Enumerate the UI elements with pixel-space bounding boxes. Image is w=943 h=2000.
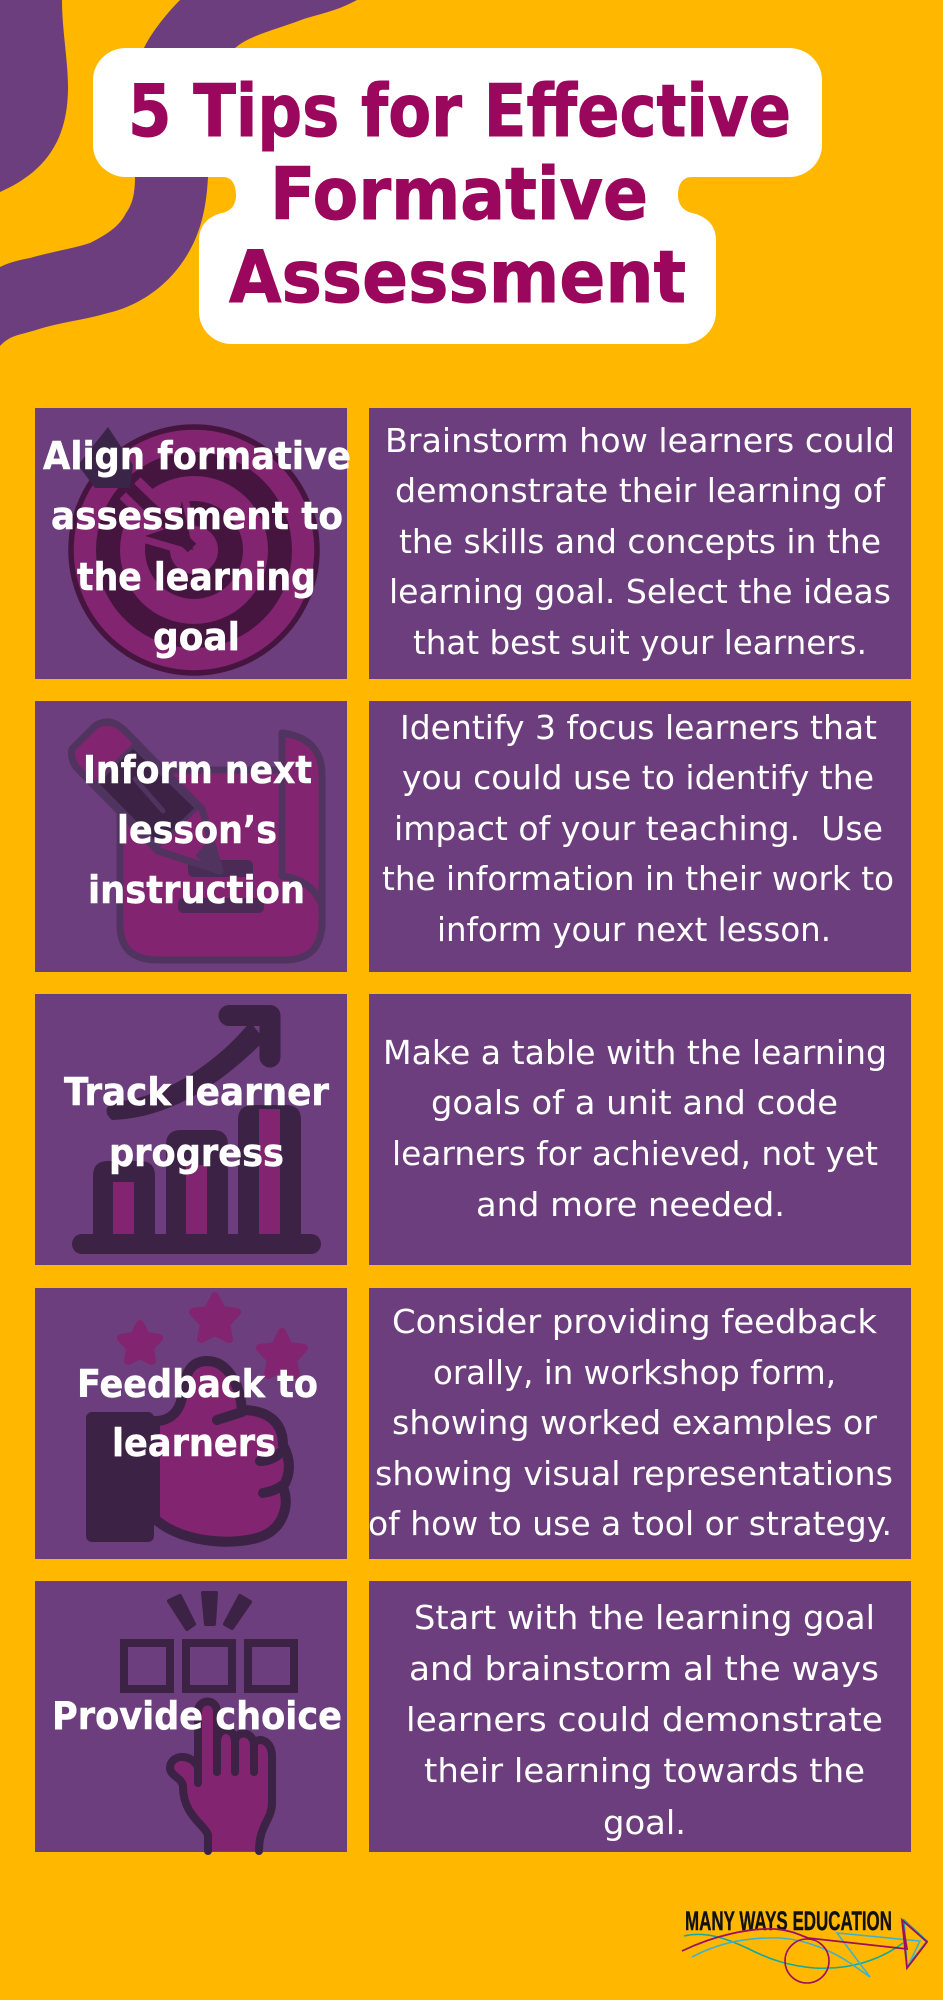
description text: impact of your teaching. Use — [394, 809, 883, 848]
panel: tip 3 heading — [35, 994, 347, 1265]
heading text: learners — [112, 1421, 276, 1465]
icon: pencil and paper — [72, 722, 322, 960]
title text — [128, 69, 791, 319]
heading text — [77, 1362, 318, 1465]
heading text: progress — [109, 1131, 284, 1175]
description text: demonstrate their learning of — [395, 471, 886, 510]
heading text — [43, 434, 351, 659]
panel: tip 2 heading — [35, 701, 347, 972]
description text: learners for achieved, not yet — [392, 1134, 878, 1173]
heading text: assessment to — [51, 494, 343, 538]
heading text: Track learner — [64, 1070, 329, 1114]
heading text: instruction — [88, 868, 305, 912]
heading text: lesson’s — [117, 808, 277, 852]
description text: orally, in workshop form, — [433, 1353, 836, 1392]
description text: Make a table with the learning — [383, 1033, 887, 1072]
panel: tip 1 heading — [35, 408, 351, 679]
description text: showing visual representations — [375, 1454, 893, 1493]
logo: Many Ways Education — [682, 1906, 927, 1983]
description text: Identify 3 focus learners that — [400, 708, 877, 747]
panel: tip 4 description — [368, 1288, 911, 1559]
icon: hand choosing between boxes — [124, 1593, 294, 1851]
title background shape — [93, 48, 822, 344]
heading text: Provide choice — [52, 1694, 342, 1738]
description text — [406, 1598, 883, 1842]
heading text — [83, 748, 312, 912]
icon: target with arrow — [71, 427, 317, 673]
description text: of how to use a tool or strategy. — [368, 1504, 892, 1543]
icon: thumbs up with stars — [86, 1296, 304, 1542]
description text: their learning towards the — [424, 1751, 865, 1790]
panel: tip 5 description — [369, 1581, 911, 1852]
description text — [385, 421, 895, 662]
description text: the information in their work to — [382, 859, 894, 898]
heading text: Feedback to — [77, 1362, 318, 1406]
panel: tip 1 description — [369, 408, 911, 679]
description text — [368, 1302, 893, 1543]
heading text: Inform next — [83, 748, 312, 792]
heading text: Align formative — [43, 434, 351, 478]
description text: learning goal. Select the ideas — [389, 572, 891, 611]
panel: tip 3 description — [369, 994, 911, 1265]
description text — [383, 1033, 887, 1224]
title text: Formative — [270, 152, 648, 236]
description text: that best suit your learners. — [413, 623, 867, 662]
icon: bar chart with rising arrow — [72, 1016, 321, 1254]
description text: inform your next lesson. — [437, 910, 831, 949]
panel: tip 2 description — [369, 701, 911, 972]
title text: 5 Tips for Effective — [128, 69, 791, 153]
description text: the skills and concepts in the — [399, 522, 881, 561]
description text: Brainstorm how learners could — [385, 421, 895, 460]
description text — [382, 708, 894, 949]
description text: you could use to identify the — [402, 758, 874, 797]
heading text: goal — [153, 615, 240, 659]
heading text: the learning — [77, 555, 316, 599]
heading text — [64, 1070, 329, 1175]
title text: Assessment — [229, 235, 686, 319]
description text: learners could demonstrate — [406, 1700, 883, 1739]
description text: and more needed. — [476, 1185, 785, 1224]
title — [93, 48, 822, 344]
description text: Consider providing feedback — [392, 1302, 878, 1341]
description text: showing worked examples or — [392, 1403, 877, 1442]
description text: and brainstorm al the ways — [409, 1649, 879, 1688]
decorative purple swoosh centre — [0, 0, 357, 346]
description text: Start with the learning goal — [414, 1598, 875, 1637]
decorative purple swoosh left — [0, 0, 68, 192]
panel: tip 4 heading — [35, 1288, 347, 1559]
description text: goals of a unit and code — [431, 1083, 838, 1122]
panel: tip 5 heading — [35, 1581, 347, 1852]
description text: goal. — [603, 1803, 686, 1842]
